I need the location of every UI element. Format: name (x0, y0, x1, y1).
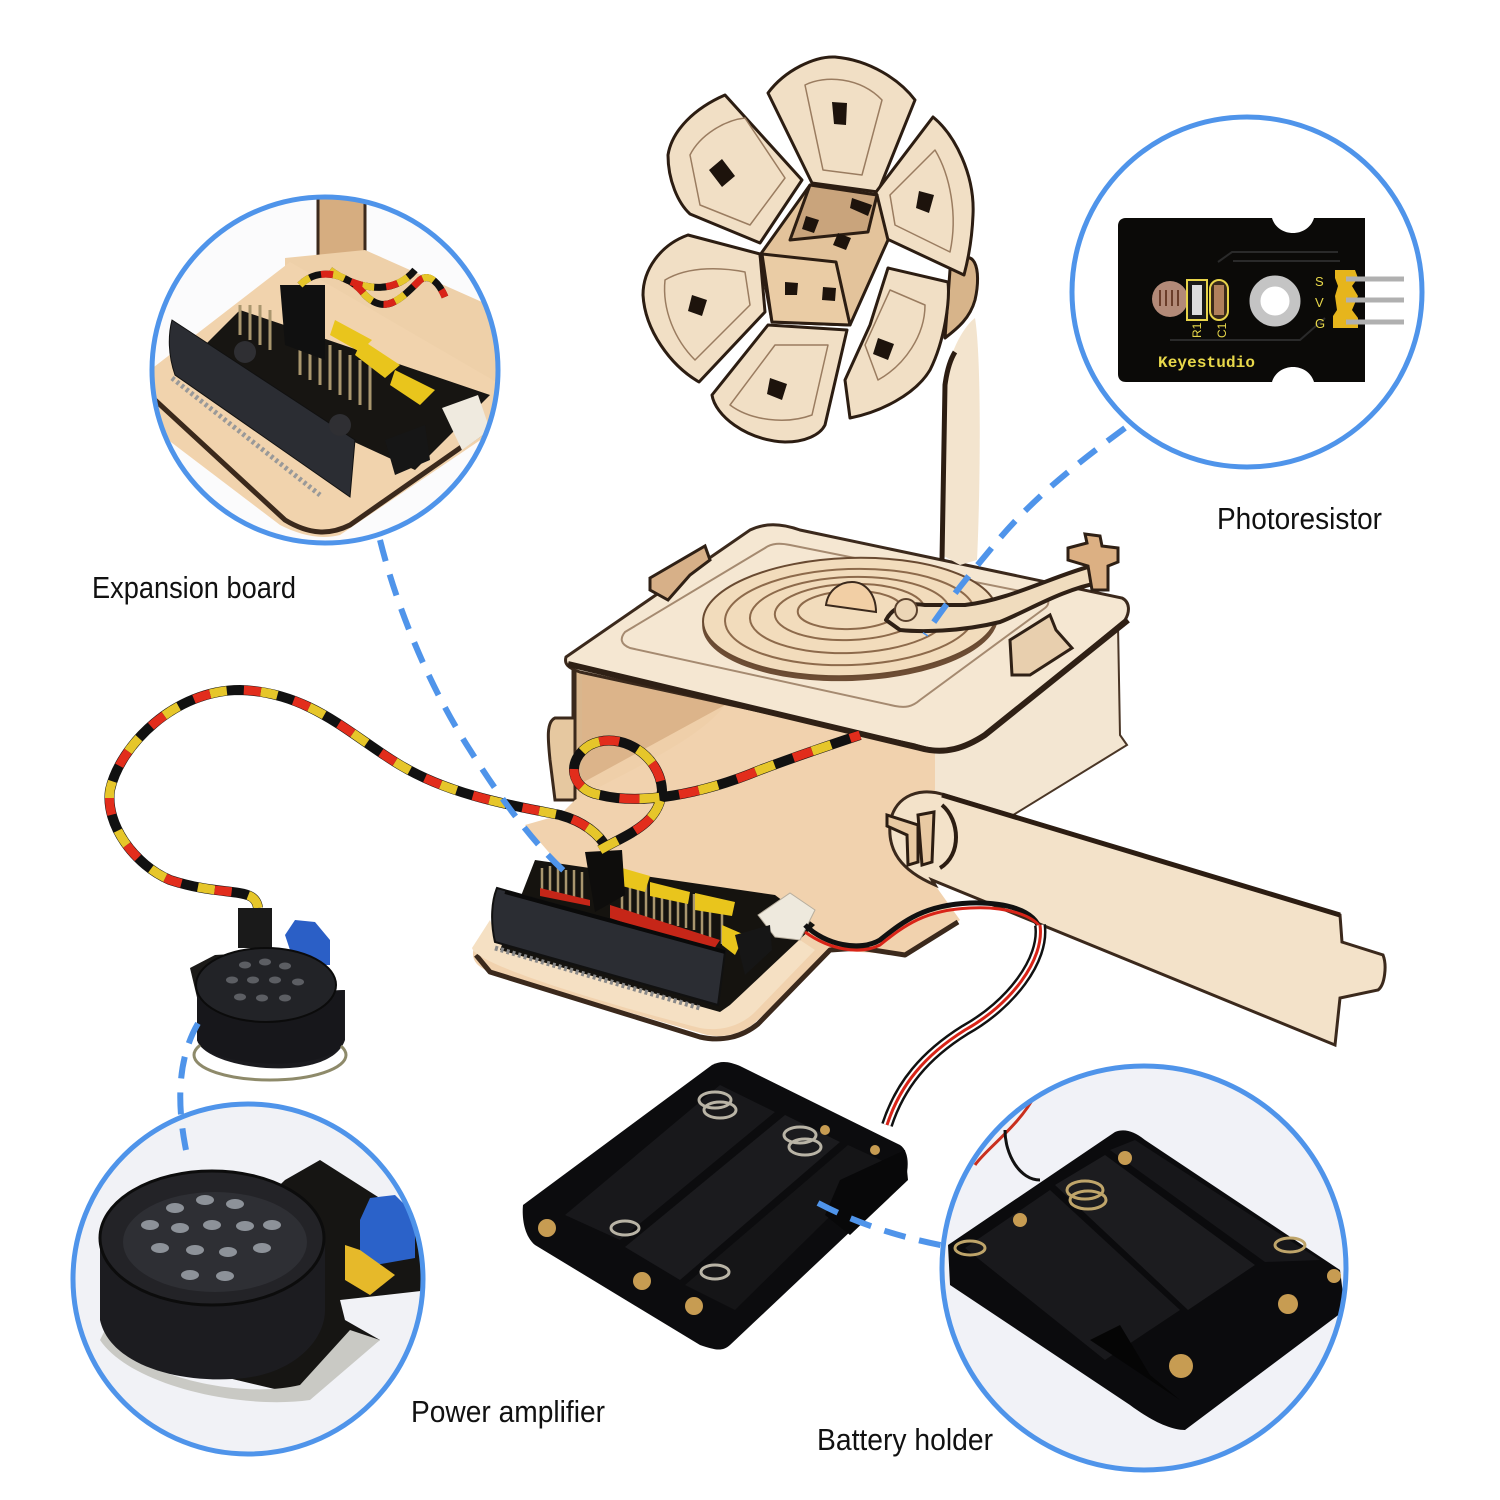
petal bottom right (845, 268, 948, 418)
back flap (548, 718, 575, 800)
battery cable near board (805, 903, 1040, 946)
blue potentiometer (285, 920, 330, 965)
springs (611, 1092, 821, 1279)
flower horn (643, 57, 978, 442)
expansion board (492, 850, 815, 1012)
inner inset lines (665, 79, 953, 420)
sensor module (1118, 218, 1404, 382)
horn back ring (945, 258, 978, 338)
callout: power amplifier (70, 1020, 605, 1460)
yellow header (1333, 270, 1358, 328)
top inset outline (622, 544, 1048, 707)
speaker wire (109, 690, 608, 908)
black jumper housing (585, 850, 625, 912)
sensor module: C1 (1215, 322, 1229, 338)
inset photo (940, 1065, 1350, 1475)
petal right (876, 117, 973, 275)
stem (942, 318, 980, 565)
petal upper left (668, 95, 802, 243)
dashed leader (380, 540, 565, 872)
dashed leader (925, 428, 1125, 635)
inset photo (150, 195, 510, 545)
header pins (542, 866, 722, 944)
edge connector strip (495, 948, 700, 1008)
white JST connector (758, 893, 815, 940)
small speaker module (190, 908, 346, 1080)
petal left (643, 235, 765, 382)
photoresistor element (1152, 281, 1188, 317)
sensor module: R1 (1190, 322, 1204, 338)
board text: Keyestudio (1158, 354, 1255, 372)
board pcb (500, 860, 815, 1012)
left clip (650, 546, 710, 600)
sensor module: S (1315, 274, 1324, 289)
yellow jumpers (622, 868, 745, 955)
microbit slot (492, 888, 725, 1005)
end wall (825, 1150, 908, 1235)
red header strips (540, 888, 720, 952)
callout: battery holder (817, 1065, 1350, 1475)
sensor module: G (1315, 316, 1325, 331)
speaker holes (731, 741, 914, 820)
turntable (700, 553, 1000, 686)
twisted wires (109, 690, 1042, 1125)
petal slots (688, 102, 934, 400)
battery cable (887, 925, 1040, 1125)
mounting ring (1255, 281, 1295, 321)
speaker body (197, 990, 345, 1068)
brass rivets (538, 1125, 880, 1315)
sensor module: V (1315, 295, 1324, 310)
pins (1346, 279, 1404, 322)
right clip (1010, 615, 1072, 675)
battery holder (523, 1062, 908, 1350)
label: Photoresistor (1217, 501, 1382, 536)
petal bottom left (712, 325, 847, 442)
top plate (566, 525, 1128, 750)
dashed leader (818, 1203, 945, 1246)
gramophone box (472, 318, 1385, 1045)
arm post (1068, 534, 1118, 590)
box right side (930, 625, 1127, 860)
tone arm (886, 565, 1102, 631)
side flap arm (890, 792, 1385, 1045)
box interior (574, 668, 935, 880)
label: Expansion board (92, 570, 296, 605)
jumper plug (238, 908, 272, 948)
inset photo (70, 1100, 430, 1460)
petal top (768, 57, 915, 192)
horn throat (760, 185, 888, 325)
callout: photoresistor (925, 117, 1422, 635)
hinge pin (887, 812, 934, 865)
label: Battery holder (817, 1422, 993, 1457)
looped wire (574, 735, 860, 850)
compartments (565, 1085, 775, 1240)
holder body (523, 1062, 908, 1350)
label: Power amplifier (411, 1394, 605, 1429)
callout: expansion board (92, 195, 565, 872)
floor panel (473, 705, 960, 1036)
dashed leader (180, 1020, 200, 1150)
power switch (735, 925, 772, 975)
turntable spindle (826, 582, 876, 612)
module board (190, 950, 300, 1010)
